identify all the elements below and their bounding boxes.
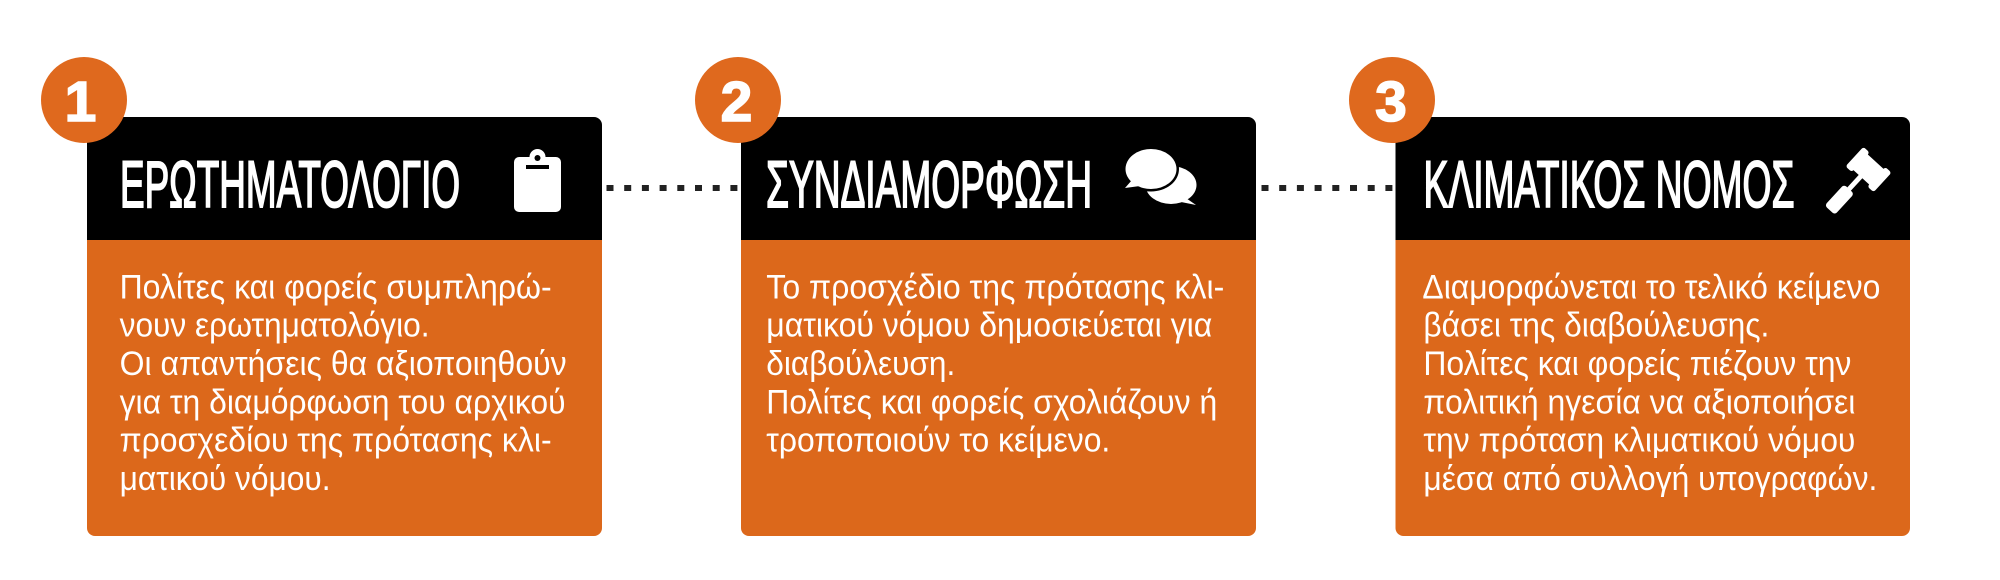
- text block 1: Πολίτες και φορείς συμπληρώ-: [120, 268, 552, 306]
- text block 3: την πρόταση κλιματικού νόμου: [1423, 422, 1855, 460]
- text block 1: νουν ερωτηματολόγιο.: [120, 307, 430, 345]
- connector: dots between step 2 and step 3: [1262, 185, 1392, 191]
- text block 1: προσχεδίου της πρότασης κλι-: [120, 422, 552, 460]
- card body 2: [741, 240, 1256, 536]
- badge: number 2: 2: [721, 70, 752, 134]
- icon: gavel: [1816, 147, 1892, 224]
- text block 3: Πολίτες και φορείς πιέζουν την: [1423, 345, 1851, 383]
- card header 3: [1396, 117, 1910, 240]
- text block 2: τροποποιούν το κείμενο.: [766, 422, 1110, 460]
- badge: number 3: 3: [1375, 70, 1407, 134]
- text block 3: πολιτική ηγεσία να αξιοποιήσει: [1423, 383, 1855, 421]
- panel: step 3 climate law: [1396, 117, 1910, 536]
- badge: number 1: 1: [65, 70, 96, 134]
- text block 2: ματικού νόμου δημοσιεύεται για: [766, 307, 1212, 345]
- heading 2: ΣΥΝΔΙΑΜΟΡΦΩΣΗ: [766, 147, 1092, 221]
- badge: number 3: [1349, 57, 1435, 143]
- heading 1: ΕΡΩΤΗΜΑΤΟΛΟΓΙΟ: [120, 147, 460, 221]
- text block 3: βάσει της διαβούλευσης.: [1423, 307, 1769, 345]
- text block 1: για τη διαμόρφωση του αρχικού: [120, 383, 566, 421]
- text block 2: Το προσχέδιο της πρότασης κλι-: [766, 268, 1224, 306]
- icon: speech bubbles: [1123, 146, 1196, 205]
- card body 1: [87, 240, 602, 536]
- card header 2: [741, 117, 1256, 240]
- icon: clipboard: [514, 149, 561, 212]
- text block 3: [1422, 268, 1880, 498]
- card header 1: [87, 117, 602, 240]
- text block 3: Διαμορφώνεται το τελικό κείμενο: [1422, 268, 1880, 306]
- card body 3: [1396, 240, 1910, 536]
- text block 1: [120, 268, 567, 498]
- badge: number 2: [695, 57, 781, 143]
- text block 1: ματικού νόμου.: [120, 460, 331, 498]
- text block 2: Πολίτες και φορείς σχολιάζουν ή: [766, 383, 1217, 421]
- badge: number 1: [41, 57, 127, 143]
- text block 2: διαβούλευση.: [766, 345, 955, 383]
- panel: step 2 co-shaping: [741, 117, 1256, 536]
- text block 3: μέσα από συλλογή υπογραφών.: [1423, 460, 1877, 498]
- panel: step 1 questionnaire: [87, 117, 602, 536]
- text block 1: Οι απαντήσεις θα αξιοποιηθούν: [120, 345, 567, 383]
- connector: dots between step 1 and step 2: [606, 185, 737, 191]
- text block 2: [766, 268, 1224, 460]
